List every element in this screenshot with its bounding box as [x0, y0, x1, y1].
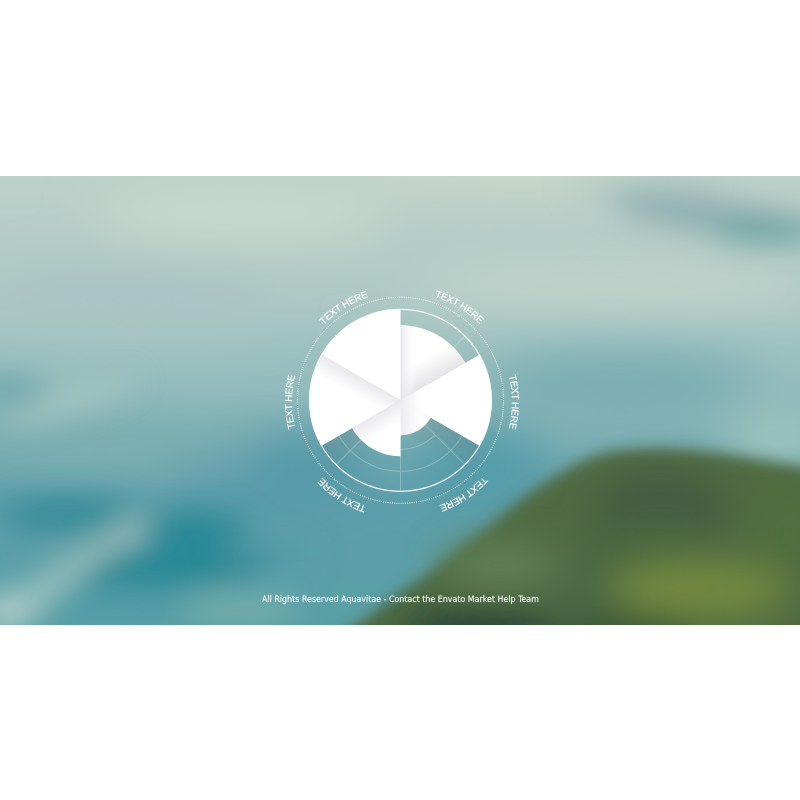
label: bottom right: TEXT HERE	[440, 478, 488, 512]
wedge: bottom right, 120 to 180 degrees	[400, 400, 431, 435]
label: left: TEXT HERE	[285, 374, 296, 430]
ring labels	[285, 290, 519, 512]
label: bottom left: TEXT HERE	[318, 478, 364, 512]
wedge: bottom left, 180 to 240 degrees	[352, 400, 400, 456]
dotted outer ring	[298, 297, 504, 503]
wedge: left, 240 to 300 degrees	[310, 355, 400, 446]
wedge: top left, 300 to 360 degrees	[322, 309, 400, 400]
wedge: top right, 0 to 60 degrees	[400, 325, 466, 400]
wedge shadow bands	[322, 400, 479, 491]
blurred photo background	[0, 158, 800, 652]
footer credit: All Rights Reserved Aquavitae - Contact the Envato Market Help Team	[262, 594, 539, 604]
label: top left: TEXT HERE	[318, 290, 368, 324]
wedge: right, 60 to 120 degrees	[400, 355, 491, 446]
radial chart	[298, 297, 504, 503]
chart grid lines	[336, 336, 465, 491]
label: top right: TEXT HERE	[436, 290, 484, 324]
wedge: right, inner shading	[400, 386, 426, 415]
label: right: TEXT HERE	[508, 374, 519, 430]
solid inner ring	[310, 309, 492, 491]
